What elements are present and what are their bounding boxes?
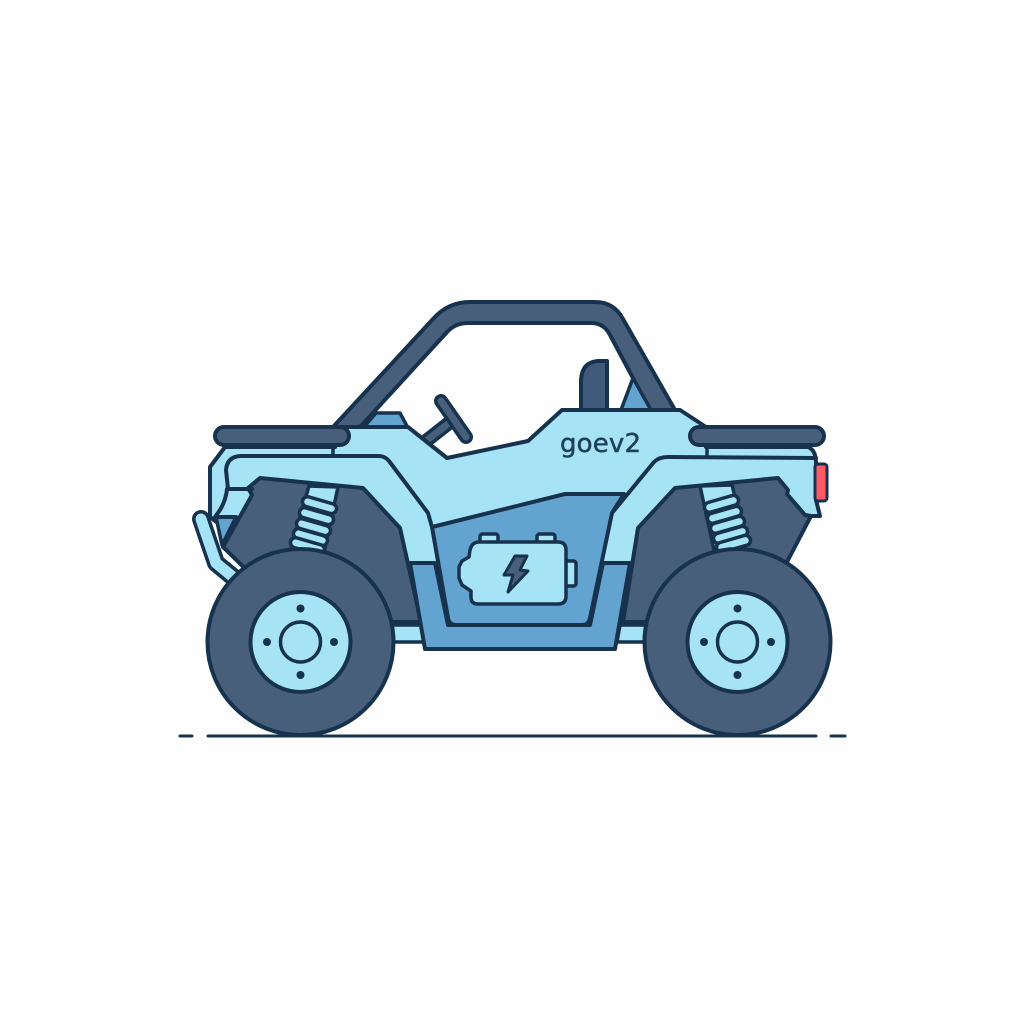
hood vent xyxy=(363,413,408,428)
ground line xyxy=(180,734,845,738)
front fender well xyxy=(223,478,421,622)
steering wheel xyxy=(426,401,466,441)
fender outlines xyxy=(215,456,816,527)
front inner panel xyxy=(216,517,236,545)
roll cage xyxy=(333,302,675,427)
rear fender well xyxy=(623,478,811,622)
lower battery tray xyxy=(410,563,630,649)
front lower strip xyxy=(390,625,426,642)
front rail xyxy=(215,427,349,445)
front shock absorber xyxy=(289,486,338,556)
battery compartment panel xyxy=(432,494,624,625)
icon: battery with lightning bolt xyxy=(459,534,576,604)
front bumper tube xyxy=(201,519,233,577)
front wheel xyxy=(208,549,394,735)
rear lower strip xyxy=(617,625,650,642)
rear seat brace xyxy=(621,378,651,410)
rear wheel xyxy=(644,549,830,735)
brand label: goev2 xyxy=(560,429,641,459)
vehicle body xyxy=(210,410,820,622)
seat xyxy=(581,361,607,412)
rear shock absorber xyxy=(700,485,752,553)
rear rail xyxy=(690,427,824,445)
tail light xyxy=(815,464,827,501)
